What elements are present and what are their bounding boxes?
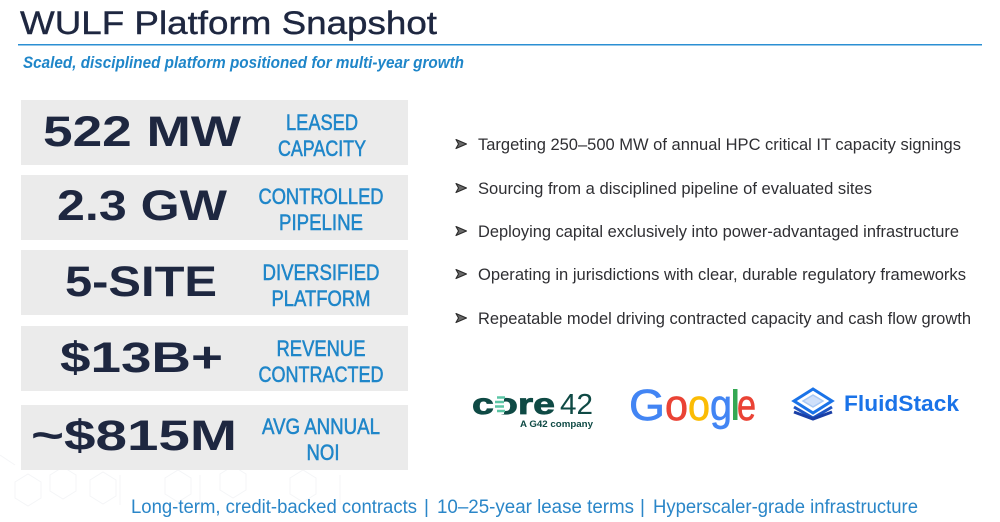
footer tagline: 10–25-year lease terms bbox=[437, 497, 634, 518]
metric: diversified platform: 5-SITE bbox=[65, 258, 217, 306]
metric: controlled pipeline: 2.3 GW bbox=[57, 182, 227, 230]
metric: diversified platform: PLATFORM bbox=[272, 286, 370, 311]
metric: leased capacity: 522 MW bbox=[43, 108, 241, 156]
metric: average annual NOI: AVG ANNUAL bbox=[262, 414, 380, 439]
bullet 4: Operating in jurisdictions with clear, durable regulatory frameworks bbox=[478, 265, 966, 284]
logo: FluidStack bbox=[794, 389, 960, 419]
bullet 1: Targeting 250–500 MW of annual HPC critical IT capacity signings bbox=[478, 135, 961, 154]
logo: Google: o bbox=[688, 381, 710, 430]
logo: Google: e bbox=[737, 381, 756, 430]
footer tagline: | bbox=[640, 497, 645, 518]
metric: controlled pipeline: CONTROLLED bbox=[258, 184, 384, 209]
metric: controlled pipeline bbox=[21, 175, 408, 240]
metric: revenue contracted: REVENUE bbox=[276, 336, 366, 361]
metric: average annual NOI: ~$815M bbox=[31, 412, 237, 460]
logo: core42: core bbox=[472, 388, 555, 421]
metric: revenue contracted: CONTRACTED bbox=[258, 362, 384, 387]
logo: Google: G bbox=[629, 381, 665, 430]
metric: revenue contracted: $13B+ bbox=[60, 334, 223, 382]
logo: FluidStack: FluidStack bbox=[844, 391, 960, 416]
metric: leased capacity bbox=[21, 100, 408, 165]
footer tagline: | bbox=[424, 497, 429, 518]
metric: leased capacity: CAPACITY bbox=[278, 136, 366, 161]
title rule bbox=[18, 44, 982, 46]
footer tagline: Long-term, credit-backed contracts bbox=[131, 497, 417, 518]
logo: Google: g bbox=[710, 381, 732, 430]
metric: diversified platform bbox=[21, 250, 408, 315]
panel: key metrics bbox=[21, 100, 408, 470]
metric: controlled pipeline: PIPELINE bbox=[279, 210, 363, 235]
metric: average annual NOI: NOI bbox=[306, 440, 340, 465]
metric: average annual NOI bbox=[21, 405, 408, 470]
bullet 5: Repeatable model driving contracted capacity and cash flow growth bbox=[478, 309, 971, 328]
logo: Google: o bbox=[665, 381, 688, 430]
footer tagline: Hyperscaler-grade infrastructure bbox=[653, 497, 918, 518]
footer tagline bbox=[131, 497, 918, 518]
bullet 3: Deploying capital exclusively into power-advantaged infrastructure bbox=[478, 222, 959, 241]
metric: leased capacity: LEASED bbox=[286, 110, 358, 135]
bullet 2: Sourcing from a disciplined pipeline of evaluated sites bbox=[478, 179, 872, 198]
logo: core42 bbox=[472, 388, 593, 429]
logo: core42: 42 bbox=[560, 389, 593, 421]
panel: strategy bullets bbox=[456, 135, 971, 328]
metric: diversified platform: DIVERSIFIED bbox=[262, 260, 380, 285]
title: WULF Platform Snapshot bbox=[20, 5, 437, 41]
logo: core42: A G42 company bbox=[520, 419, 593, 429]
subtitle: Scaled, disciplined platform positioned for multi-year growth bbox=[23, 54, 464, 72]
logo: Google bbox=[629, 381, 756, 430]
metric: revenue contracted bbox=[21, 326, 408, 391]
